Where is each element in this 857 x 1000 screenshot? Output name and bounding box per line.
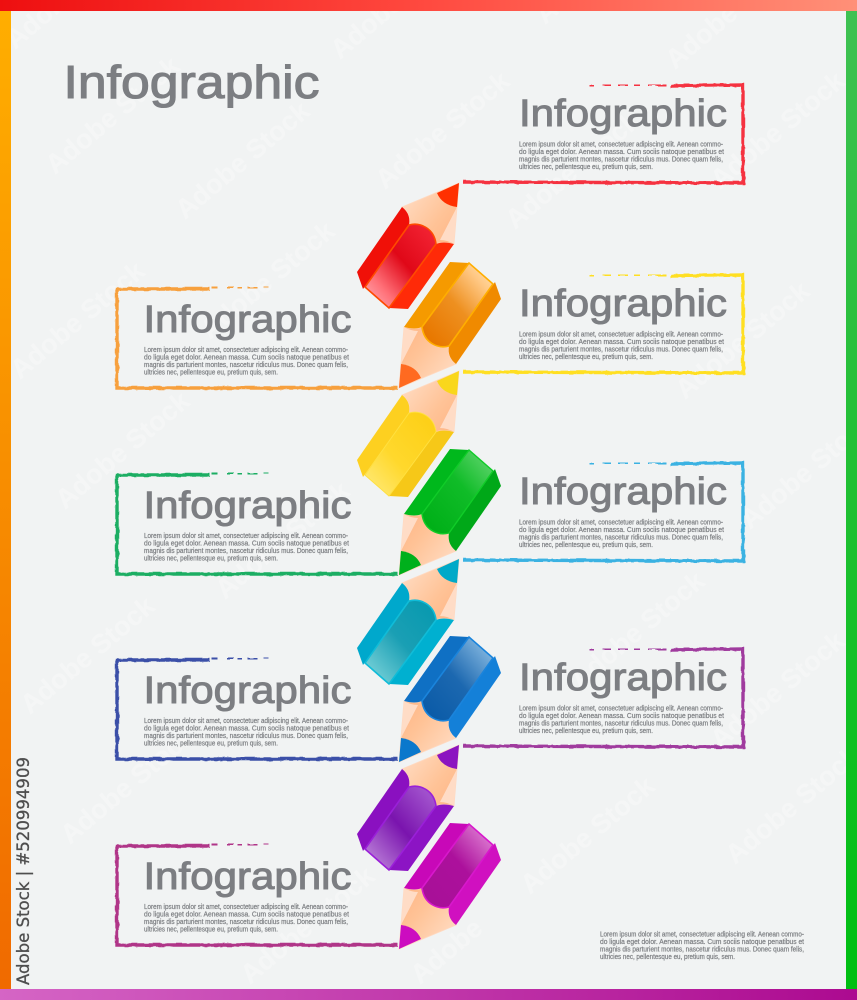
panel: green text box: do ligula eget dolor. Aenean massa. Cum sociis natoque penatibus et [144,540,349,548]
footnote text block: do ligula eget dolor. Aenean massa. Cum sociis natoque penatibus et [600,939,804,946]
infographic canvas: Adobe Stock [705,65,851,195]
infographic canvas: Adobe Stock [565,565,711,695]
panel: navy text box: ultricies nec, pellentesque eu, pretium quis, sem. [144,740,278,748]
panel: blue-cyan text box: do ligula eget dolor. Aenean massa. Cum sociis natoque penatibus et [519,527,724,534]
panel: navy text box: do ligula eget dolor. Aenean massa. Cum sociis natoque penatibus et [144,726,349,732]
panel: yellow text box: magnis dis parturient montes, nascetur ridiculus mus. Donec quam felis, [519,346,723,354]
footnote text block: Lorem ipsum dolor sit amet, consectetuer adipiscing elit. Aenean commo- [600,932,805,938]
panel: orange text box: do ligula eget dolor. Aenean massa. Cum sociis natoque penatibus et [144,354,349,362]
panel: green text box: ultricies nec, pellentesque eu, pretium quis, sem. [144,556,278,562]
panel: blue-cyan text box: ultricies nec, pellentesque eu, pretium quis, sem. [519,542,653,549]
panel: magenta text box: Infographic [144,856,352,898]
panel: magenta text box: Lorem ipsum dolor sit amet, consectetuer adipiscing elit. Aenean commo- [144,904,349,911]
panel: purple text box: do ligula eget dolor. Aenean massa. Cum sociis natoque penatibus et [519,713,724,720]
panel: green text box: Infographic [144,485,352,527]
footnote text block: ultricies nec, pellentesque eu, pretium quis, sem. [600,954,735,961]
footnote text block: magnis dis parturient montes, nascetur ridiculus mus. Donec quam felis, [600,946,804,954]
panel: yellow text box: Infographic [519,283,727,325]
panel: orange text box: ultricies nec, pellentesque eu, pretium quis, sem. [144,370,278,376]
panel: green text box [117,473,398,574]
infographic canvas: Adobe Stock [40,50,186,180]
infographic canvas: Adobe Stock [670,275,816,405]
infographic canvas: Adobe Stock [50,385,196,515]
panel: magenta text box [117,844,398,945]
panel: orange text box: magnis dis parturient montes, nascetur ridiculus mus. Donec quam felis, [144,362,348,369]
panel: blue-cyan text box: Infographic [519,471,727,513]
icon: magenta pencil [399,823,501,949]
panel: green text box: Lorem ipsum dolor sit amet, consectetuer adipiscing elit. Aenean commo- [144,533,349,540]
panel: purple text box: Lorem ipsum dolor sit amet, consectetuer adipiscing elit. Aenean commo- [519,706,724,712]
panel: yellow text box: ultricies nec, pellentesque eu, pretium quis, sem. [519,354,653,361]
panel: orange text box: Lorem ipsum dolor sit amet, consectetuer adipiscing elit. Aenean commo- [144,347,349,354]
panel: navy text box [117,658,398,759]
infographic canvas: Adobe Stock [235,860,381,990]
panel: purple text box: Infographic [519,657,727,699]
infographic canvas: Adobe Stock [55,720,201,850]
panel: navy text box: Lorem ipsum dolor sit amet, consectetuer adipiscing elit. Aenean commo- [144,718,349,725]
panel: blue-cyan text box [463,463,743,561]
icon: cyan pencil [357,559,459,685]
panel: magenta text box: do ligula eget dolor. Aenean massa. Cum sociis natoque penatibus et [144,912,349,918]
panel: navy text box: Infographic [144,670,352,712]
panel: yellow text box [463,275,743,373]
panel: navy text box: magnis dis parturient montes, nascetur ridiculus mus. Donec quam felis, [144,733,348,740]
left border [0,11,11,989]
infographic canvas: Adobe Stock [5,255,151,385]
panel: orange text box [117,287,398,388]
panel: red text box: Infographic [519,93,727,135]
infographic canvas: Adobe [405,913,488,990]
panel: purple text box [463,649,743,747]
main title: Infographic [64,56,320,108]
panel: yellow text box: do ligula eget dolor. Aenean massa. Cum sociis natoque penatibus et [519,339,724,346]
stock id label: Adobe Stock | #520994909 [14,757,34,985]
panel: blue-cyan text box: Lorem ipsum dolor sit amet, consectetuer adipiscing elit. Aenean commo- [519,520,724,526]
panel: blue-cyan text box: magnis dis parturient montes, nascetur ridiculus mus. Donec quam felis, [519,534,723,542]
infographic canvas: Adobe Stock [210,475,356,605]
infographic canvas: Adobe Stock [170,95,316,225]
footnote text block [600,932,805,961]
bottom border [0,989,857,1000]
panel: orange text box: Infographic [144,299,352,341]
right border [846,11,857,989]
panel: purple text box: ultricies nec, pellentesque eu, pretium quis, sem. [519,728,653,735]
infographic canvas: Adobe Stock [195,215,341,345]
panel: red text box: do ligula eget dolor. Aenean massa. Cum sociis natoque penatibus et [519,149,724,156]
infographic canvas: Adobe Stock [15,590,161,720]
panel: red text box: magnis dis parturient montes, nascetur ridiculus mus. Donec quam felis, [519,156,723,164]
icon: orange pencil [399,262,501,388]
panel: green text box: magnis dis parturient montes, nascetur ridiculus mus. Donec quam felis, [144,548,348,555]
panel: yellow text box: Lorem ipsum dolor sit amet, consectetuer adipiscing elit. Aenean commo- [519,332,724,338]
infographic canvas: Adobe Stock [515,770,661,900]
panel: magenta text box: magnis dis parturient montes, nascetur ridiculus mus. Donec quam felis, [144,919,348,926]
infographic canvas: Adobe Stock [705,625,851,755]
infographic canvas: Adobe Stock [370,65,516,195]
top border [0,0,857,11]
icon: purple pencil [357,745,459,871]
infographic canvas: Adobe Stock [500,105,646,235]
icon: green pencil [399,449,501,575]
panel: red text box [463,85,743,183]
panel: red text box: Lorem ipsum dolor sit amet, consectetuer adipiscing elit. Aenean commo- [519,142,724,148]
panel: purple text box: magnis dis parturient montes, nascetur ridiculus mus. Donec quam felis, [519,720,723,728]
icon: red pencil [357,183,459,309]
panel: red text box: ultricies nec, pellentesque eu, pretium quis, sem. [519,164,653,171]
icon: blue pencil [399,636,501,762]
panel: magenta text box: ultricies nec, pellentesque eu, pretium quis, sem. [144,926,278,934]
icon: yellow pencil [357,371,459,497]
